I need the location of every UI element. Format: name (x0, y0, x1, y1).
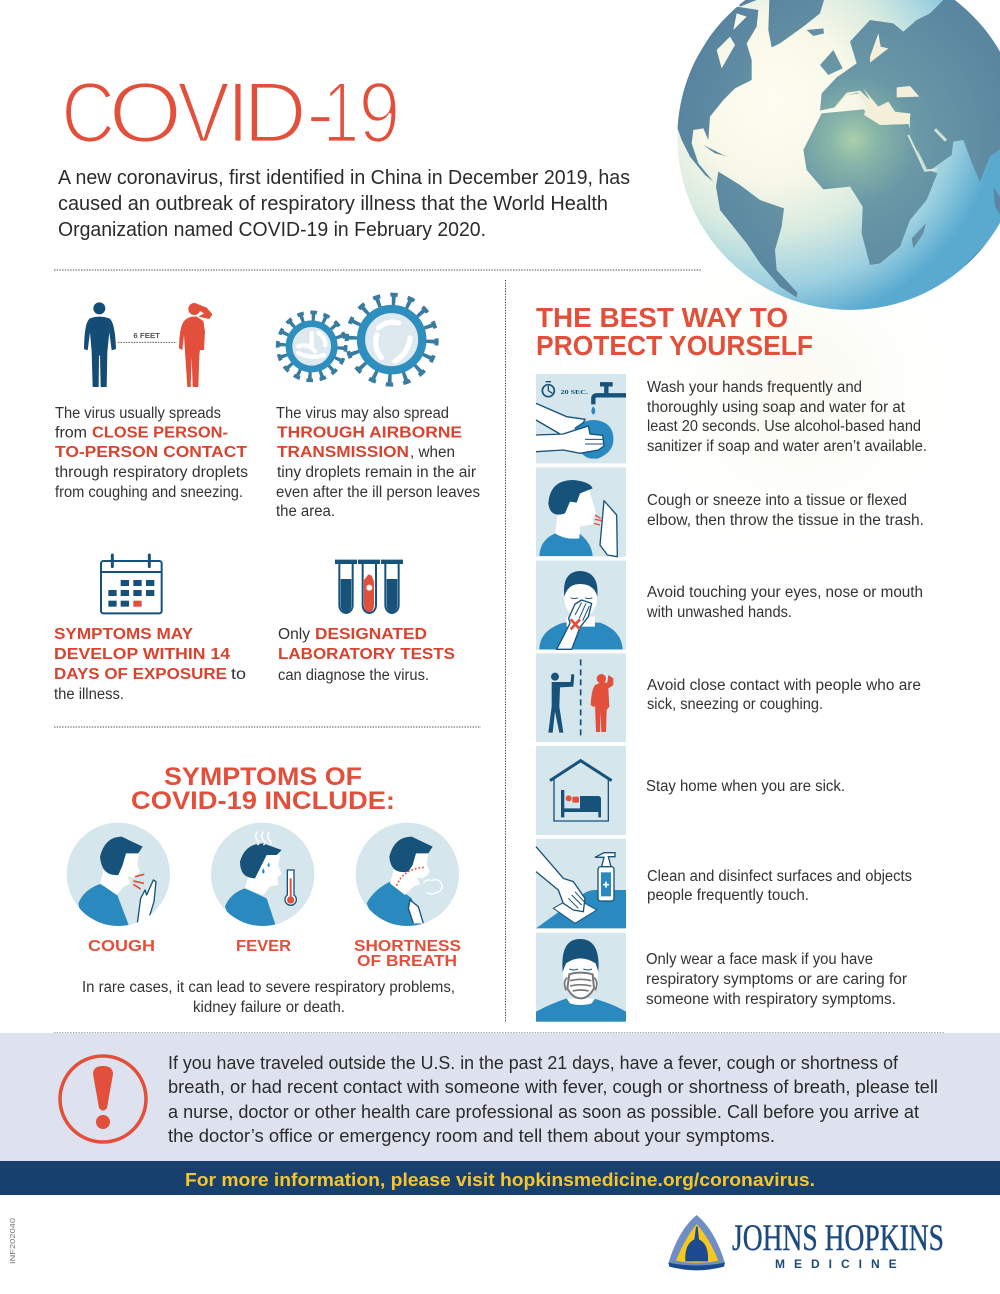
text: close contact: The virus usually spreads (55, 405, 221, 422)
icon: virus particles (278, 295, 437, 385)
title: O (108, 65, 182, 161)
text: face mask: respiratory symptoms or are caring for (646, 971, 907, 988)
travel warning panel: the doctor’s office or emergency room and tell them about your symptoms. (168, 1125, 775, 1146)
text: stay home: Stay home when you are sick. (646, 778, 845, 795)
text: airborne transmission: The virus may also spread (276, 405, 449, 422)
protect yourself heading: PROTECT YOURSELF (536, 330, 813, 361)
text: cough or sneeze: Cough or sneeze into a tissue or flexed (647, 492, 907, 509)
icon: test tubes (335, 560, 403, 613)
text: avoid touching (646, 584, 923, 621)
icon tile: avoid close contact (536, 653, 626, 742)
title: V (177, 65, 230, 161)
text: wash hands: least 20 seconds. Use alcohol-based hand (647, 418, 921, 435)
icon: shortness of breath (356, 823, 459, 928)
protect yourself heading: THE BEST WAY TO (536, 302, 788, 333)
text: wash hands: sanitizer if soap and water aren’t available. (647, 438, 927, 455)
title: - (306, 65, 335, 161)
icon tile: stay home (536, 746, 626, 835)
text: clean surfaces: people frequently touch. (647, 887, 809, 904)
text: avoid close contact: Avoid close contact with people who are (647, 677, 921, 694)
document code: INF202040 (8, 1218, 17, 1264)
intro paragraph: A new coronavirus, first identified in China in December 2019, has (58, 166, 630, 189)
text: close contact: CLOSE PERSON- (92, 424, 228, 442)
text: clean surfaces: Clean and disinfect surfaces and objects (647, 868, 912, 885)
text: rare cases: In rare cases, it can lead to severe respiratory problems, (82, 979, 455, 996)
text: wash hands (647, 379, 927, 455)
text: avoid touching: Avoid touching your eyes, nose or mouth (647, 584, 923, 601)
text: laboratory tests: LABORATORY TESTS (278, 646, 455, 663)
text: cough or sneeze: elbow, then throw the tissue in the trash. (647, 512, 924, 529)
icon tile: hand washing: 20 SEC. (561, 389, 588, 396)
text: laboratory tests: DESIGNATED (315, 626, 427, 643)
text: face mask: someone with respiratory symptoms. (646, 991, 896, 1008)
title: I (226, 65, 250, 161)
more information band (0, 1161, 1000, 1195)
symptom labels: SHORTNESS (354, 938, 461, 955)
text: avoid touching: with unwashed hands. (646, 604, 792, 621)
symptom labels (88, 938, 461, 970)
symptom labels: COUGH (88, 938, 155, 955)
text: close contact: TO-PERSON CONTACT (55, 444, 248, 461)
text: airborne transmission: even after the ill person leaves (276, 484, 480, 501)
title: C (61, 65, 115, 161)
icon tile: hand washing (536, 374, 626, 463)
text: laboratory tests: Only (278, 626, 310, 643)
symptom labels: OF BREATH (357, 953, 457, 970)
icon: six feet distance (84, 302, 212, 387)
symptoms heading (131, 763, 395, 815)
text: face mask (646, 951, 907, 1008)
icon: exclamation (60, 1056, 146, 1142)
text: symptoms timing: DAYS OF EXPOSURE (54, 666, 227, 683)
text: symptoms timing: the illness. (54, 686, 124, 703)
text: wash hands: Wash your hands frequently and (647, 379, 862, 396)
text: airborne transmission: , when (410, 444, 455, 461)
symptoms heading: COVID-19 INCLUDE: (131, 787, 395, 815)
icon: six feet distance: 6 FEET (133, 331, 161, 340)
title: 1 (323, 65, 359, 161)
travel warning panel: a nurse, doctor or other health care professional as soon as possible. Call before you arrive at (168, 1101, 919, 1122)
travel warning panel: breath, or had recent contact with someone with fever, cough or shortness of breath, please tell (168, 1076, 938, 1097)
travel warning panel: If you have traveled outside the U.S. in the past 21 days, have a fever, cough or shortness of (168, 1052, 899, 1073)
text: airborne transmission (276, 405, 480, 520)
icon: cough (67, 823, 170, 928)
text: cough or sneeze (647, 492, 924, 529)
more information band: For more information, please visit hopkinsmedicine.org/coronavirus. (185, 1170, 815, 1190)
symptom labels: FEVER (236, 938, 291, 955)
text: symptoms timing (54, 626, 246, 703)
text: symptoms timing: to (231, 666, 246, 683)
text: rare cases (82, 979, 455, 1016)
text: wash hands: thoroughly using soap and water for at (647, 399, 906, 416)
travel warning panel (0, 1033, 1000, 1161)
text: airborne transmission: tiny droplets remain in the air (277, 464, 476, 481)
text: face mask: Only wear a face mask if you have (646, 951, 873, 968)
text: symptoms timing: SYMPTOMS MAY (54, 626, 194, 643)
icon: calendar (101, 555, 162, 613)
icon tile: clean surfaces (536, 839, 626, 928)
intro paragraph: caused an outbreak of respiratory illness that the World Health (58, 192, 608, 215)
text: close contact (55, 405, 248, 501)
icon tile: sneeze into tissue (536, 467, 626, 557)
title (61, 65, 400, 161)
logo: Johns Hopkins Medicine: MEDICINE (775, 1257, 906, 1271)
text: close contact: through respiratory droplets (55, 464, 248, 481)
protect yourself heading (536, 302, 813, 361)
text: close contact: from coughing and sneezing. (55, 484, 243, 501)
text: rare cases: kidney failure or death. (193, 999, 345, 1016)
text: airborne transmission: THROUGH AIRBORNE (277, 424, 462, 442)
text: airborne transmission: TRANSMISSION (277, 444, 409, 461)
title: 9 (359, 65, 400, 161)
title: D (243, 65, 307, 161)
text: avoid close contact: sick, sneezing or coughing. (647, 696, 823, 713)
icon tile: face mask (536, 933, 626, 1022)
text: airborne transmission: the area. (276, 503, 335, 520)
icon: fever (211, 823, 314, 928)
text: laboratory tests (278, 626, 455, 684)
text: avoid close contact (647, 677, 921, 713)
intro paragraph: Organization named COVID-19 in February 2020. (58, 218, 486, 241)
globe (673, 0, 1000, 310)
text: symptoms timing: DEVELOP WITHIN 14 (54, 646, 230, 663)
symptoms heading: SYMPTOMS OF (164, 763, 362, 791)
text: laboratory tests: can diagnose the virus. (278, 667, 429, 684)
intro paragraph (58, 166, 630, 241)
text: close contact: from (55, 424, 87, 442)
logo: Johns Hopkins Medicine (668, 1215, 944, 1271)
icon tile: avoid touching face (536, 561, 626, 650)
text: clean surfaces (647, 868, 912, 904)
